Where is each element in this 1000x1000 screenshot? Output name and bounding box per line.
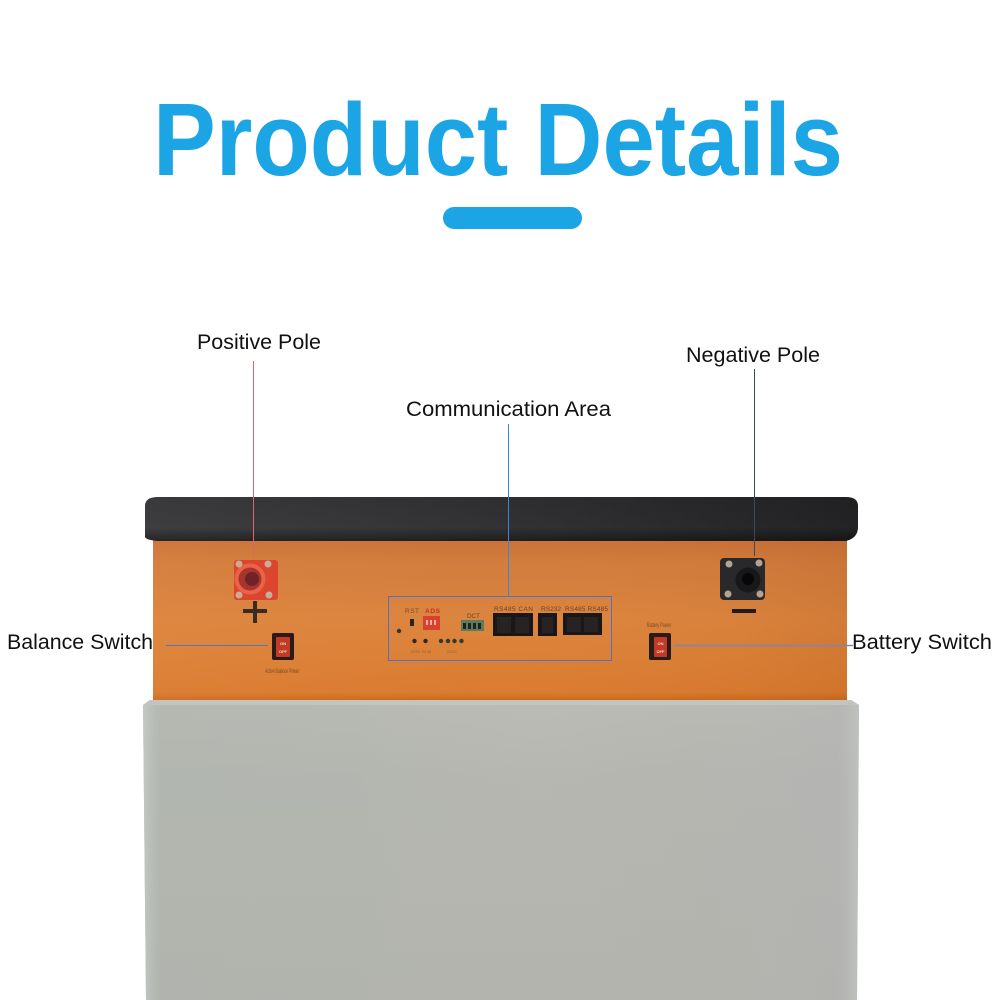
plus symbol [243, 601, 267, 623]
balance switch caption: Active Balance Power [265, 669, 299, 675]
title underline [443, 207, 582, 229]
balance switch: ON [280, 641, 286, 646]
minus symbol [732, 609, 756, 613]
leader line: negative pole [754, 369, 756, 556]
label: negative pole: Negative Pole [686, 344, 820, 367]
leader line: positive pole [252, 361, 254, 556]
communication panel: RST [405, 608, 419, 615]
communication panel: DCT [467, 613, 480, 620]
label: positive pole: Positive Pole [197, 331, 321, 354]
leader line: battery switch [674, 644, 853, 646]
title: Product Details [153, 82, 843, 197]
communication panel: RS485 RS485 [565, 606, 608, 613]
communication panel: SOC [447, 649, 457, 654]
leader line: communication area [508, 424, 510, 596]
positive pole connector [234, 560, 278, 600]
balance switch [272, 633, 294, 660]
battery switch [649, 633, 671, 660]
label: balance switch: Balance Switch [7, 631, 153, 654]
black top cover [145, 497, 858, 541]
battery switch: OFF [656, 649, 665, 654]
label: communication area: Communication Area [406, 398, 611, 421]
label: battery switch: Battery Switch [852, 631, 992, 654]
communication panel [388, 596, 612, 660]
negative pole connector [720, 558, 765, 600]
leader line: balance switch [166, 644, 268, 646]
orange battery module [153, 538, 847, 700]
battery switch caption: Battery Power [647, 623, 671, 629]
communication panel: RS232 [541, 606, 561, 613]
balance switch: OFF [279, 649, 288, 654]
communication panel: ADS [425, 608, 441, 615]
grey battery cabinet [143, 700, 859, 1000]
communication panel: RS485 CAN [494, 606, 533, 613]
battery switch: ON [658, 641, 664, 646]
communication panel: SOC SLM [411, 649, 431, 654]
